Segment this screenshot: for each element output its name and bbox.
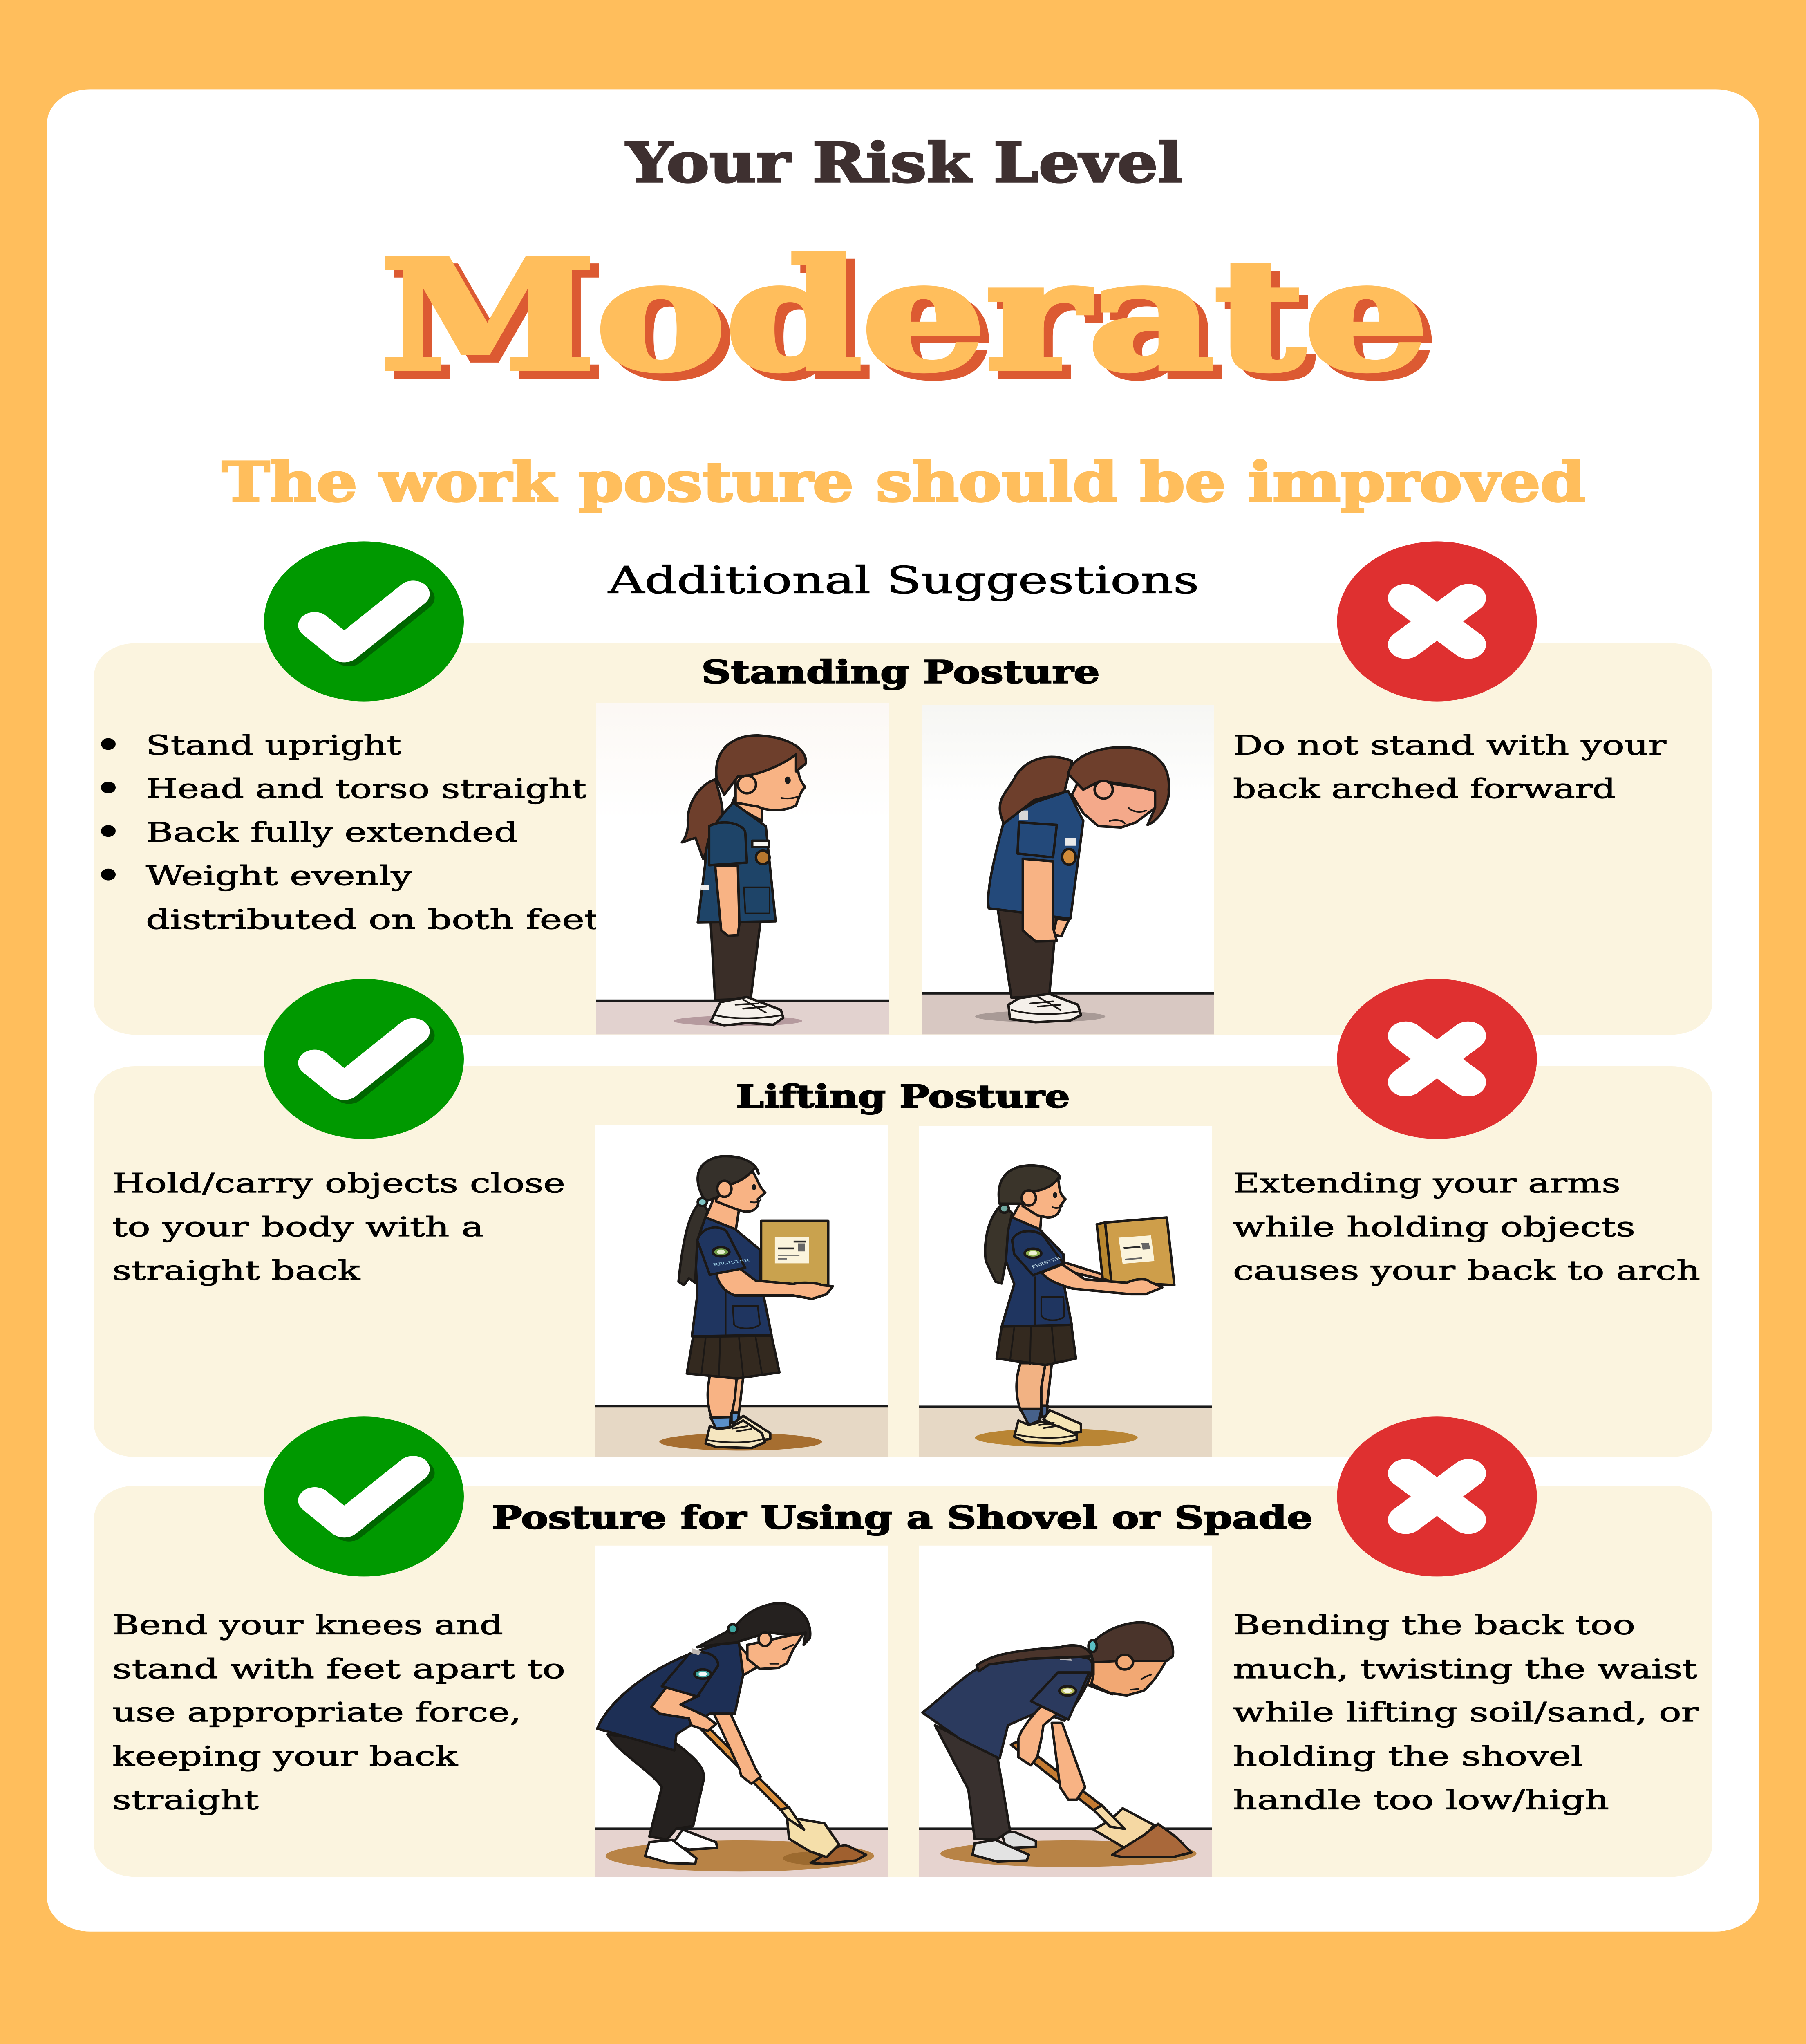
icon: green check xyxy=(264,979,464,1139)
text: incorrect shovel use: handle too low/high xyxy=(1233,1784,1609,1816)
correct standing tips: distributed on both feet xyxy=(146,904,600,935)
correct standing tips: Stand upright xyxy=(146,730,401,761)
title: Your Risk Level: Your Risk Level xyxy=(625,131,1182,195)
panel: standing posture xyxy=(94,541,1712,1035)
text: correct lifting: Hold/carry objects close xyxy=(112,1168,565,1199)
illustration: incorrect lifting: PRESTER xyxy=(1030,1256,1063,1269)
heading: Posture for Using a Shovel or Spade: Posture for Using a Shovel or Spade xyxy=(492,1499,1313,1536)
text: incorrect standing xyxy=(1233,730,1667,805)
illustration: correct standing xyxy=(596,703,889,1034)
text: incorrect shovel use: while lifting soil/sand, or xyxy=(1233,1697,1699,1728)
text: incorrect shovel use: holding the shovel xyxy=(1233,1740,1583,1772)
heading: Standing Posture: Standing Posture xyxy=(701,653,1100,690)
text: incorrect shovel use: much, twisting the waist xyxy=(1233,1653,1697,1685)
text: incorrect lifting: Extending your arms xyxy=(1233,1168,1620,1199)
text: incorrect standing: Do not stand with your xyxy=(1233,730,1667,761)
illustration: incorrect shovel use xyxy=(919,1546,1212,1877)
correct standing tips: Weight evenly xyxy=(146,860,412,892)
illustration: correct shovel use xyxy=(595,1546,888,1877)
text: correct shovel use: straight xyxy=(112,1784,259,1816)
correct standing tips: Head and torso straight xyxy=(146,773,586,805)
correct standing tips xyxy=(101,730,600,935)
illustration: incorrect lifting xyxy=(919,1126,1212,1457)
text: correct shovel use: use appropriate force, xyxy=(112,1697,521,1728)
text: incorrect shovel use: Bending the back too xyxy=(1233,1609,1635,1641)
correct standing tips: Back fully extended xyxy=(146,816,518,848)
text: correct lifting: straight back xyxy=(112,1255,360,1286)
text: incorrect standing: back arched forward xyxy=(1233,773,1616,805)
text: correct shovel use: Bend your knees and xyxy=(112,1609,503,1641)
panel: shovel posture xyxy=(94,1416,1712,1877)
text: correct shovel use: stand with feet apart to xyxy=(112,1653,565,1685)
section heading: Additional Suggestions: Additional Suggestions xyxy=(608,558,1199,602)
illustration: incorrect standing xyxy=(922,705,1214,1034)
subtitle: The work posture should be improved xyxy=(222,450,1585,514)
text: correct shovel use: keeping your back xyxy=(112,1740,458,1772)
icon: green check xyxy=(264,541,464,702)
text: incorrect lifting xyxy=(1233,1168,1700,1286)
icon: red cross xyxy=(1337,541,1537,702)
illustration: correct lifting xyxy=(595,1125,888,1457)
text: incorrect lifting: causes your back to arch xyxy=(1233,1255,1700,1286)
text: correct shovel use xyxy=(112,1609,565,1816)
icon: red cross xyxy=(1337,979,1537,1139)
icon: green check xyxy=(264,1416,464,1576)
icon: red cross xyxy=(1337,1416,1537,1576)
text: correct lifting xyxy=(112,1168,565,1286)
text: incorrect lifting: while holding objects xyxy=(1233,1211,1635,1243)
risk level: Moderate: Moderate xyxy=(389,234,1437,412)
illustration: correct lifting: REGISTER xyxy=(713,1258,751,1267)
text: correct lifting: to your body with a xyxy=(112,1211,484,1243)
risk level: Moderate: Moderate xyxy=(380,226,1428,404)
heading: Lifting Posture: Lifting Posture xyxy=(736,1078,1070,1115)
panel: lifting posture xyxy=(94,979,1712,1457)
text: incorrect shovel use xyxy=(1233,1609,1699,1816)
